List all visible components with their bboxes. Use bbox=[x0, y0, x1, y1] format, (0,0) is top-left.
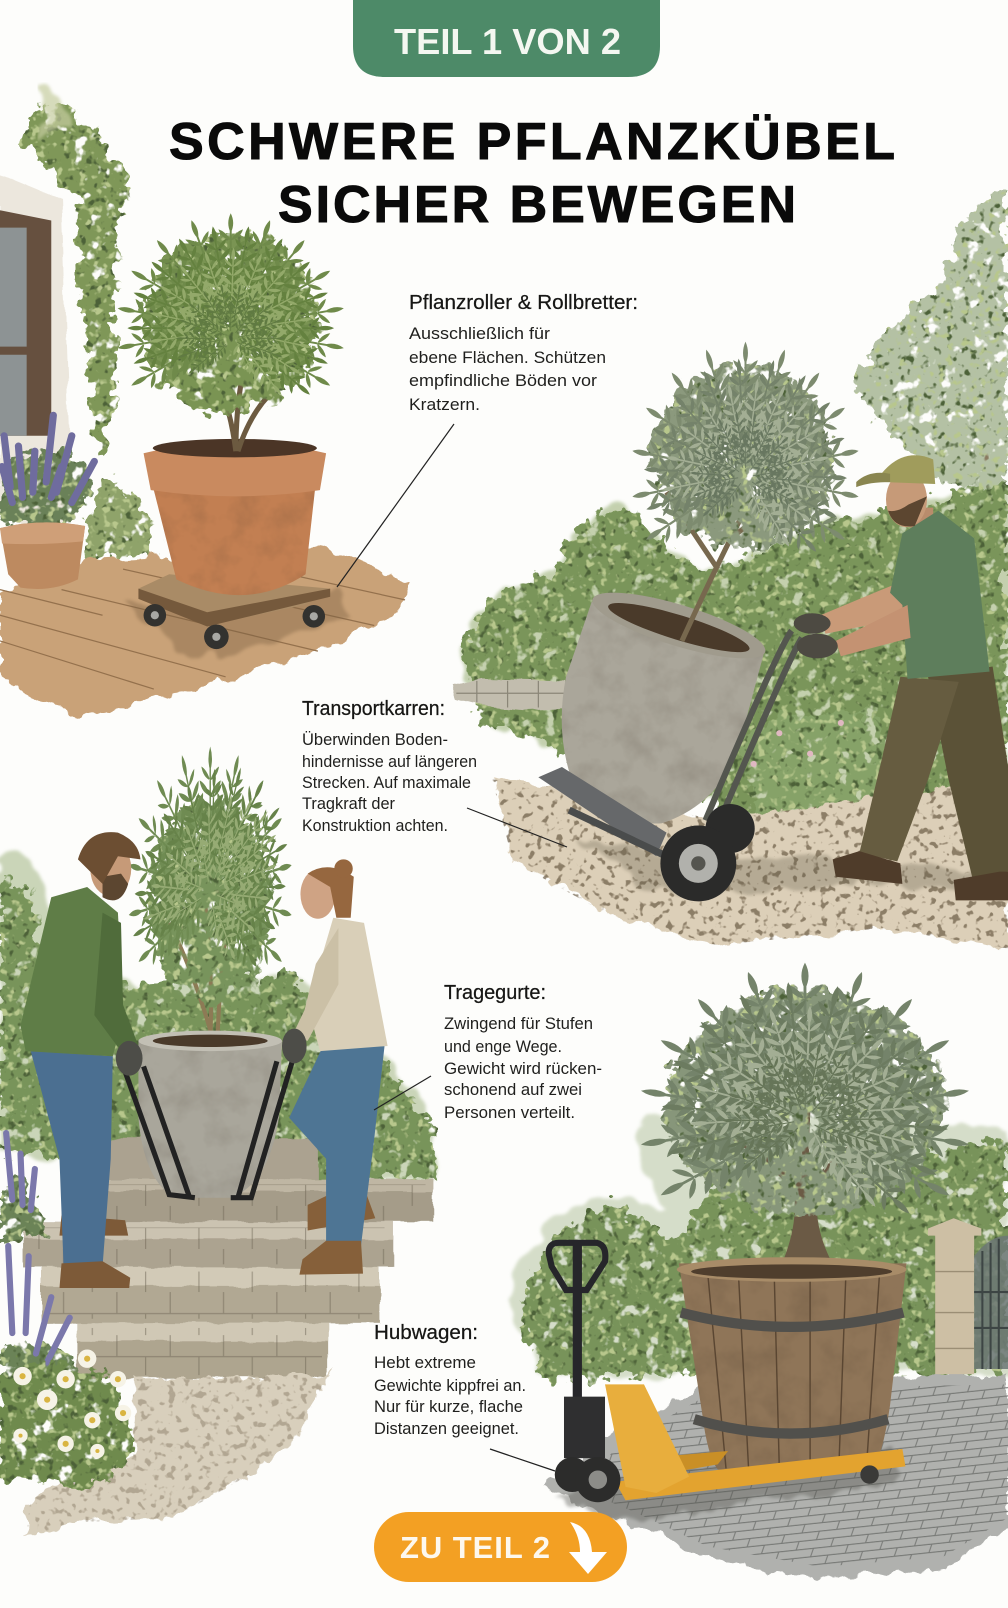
grey pot with straps bbox=[125, 1031, 292, 1198]
callout: Hubwagen bbox=[374, 1322, 526, 1438]
callout: Hubwagen: Nur für kurze, flache bbox=[374, 1398, 523, 1416]
panel: plant roller scene bbox=[0, 87, 410, 718]
callout: Pflanzroller: Kratzern. bbox=[409, 396, 480, 414]
callout: Tragegurte: und enge Wege. bbox=[444, 1038, 562, 1056]
callout: Pflanzroller: empfindliche Böden vor bbox=[409, 372, 598, 390]
concrete pot bbox=[562, 580, 771, 824]
callout: Transportkarren: Überwinden Boden- bbox=[302, 731, 448, 749]
leader line: Transportkarren bbox=[467, 808, 567, 847]
callout: Tragegurte: Personen verteilt. bbox=[444, 1104, 575, 1122]
callout: Pflanzroller bbox=[409, 292, 638, 414]
title: SCHWERE PFLANZKÜBEL bbox=[169, 113, 895, 171]
callout: Transportkarren bbox=[302, 698, 477, 835]
background bushes bbox=[508, 1113, 1008, 1379]
badge: part 1 of 2: TEIL 1 VON 2 bbox=[394, 21, 621, 62]
button: to part 2 bbox=[374, 1512, 627, 1582]
stone pillar and gate bbox=[928, 1218, 1008, 1374]
callout: Transportkarren: Transportkarren: bbox=[302, 698, 445, 720]
callout: Hubwagen: Hebt extreme bbox=[374, 1354, 476, 1372]
stone wall bbox=[453, 679, 570, 710]
climbing ivy bbox=[25, 87, 159, 559]
leader line: Hubwagen bbox=[490, 1449, 555, 1471]
callout: Pflanzroller: Ausschließlich für bbox=[409, 325, 551, 343]
panel: pallet truck scene bbox=[508, 951, 1008, 1579]
man pushing bbox=[794, 455, 1008, 900]
callout: Hubwagen: Distanzen geeignet. bbox=[374, 1420, 519, 1438]
lavender bbox=[0, 1133, 77, 1405]
panel: carrying straps scene bbox=[0, 747, 436, 1538]
callout: Transportkarren: Tragkraft der bbox=[302, 795, 395, 813]
callout: Transportkarren: Konstruktion achten. bbox=[302, 817, 448, 835]
callout: Tragegurte bbox=[444, 982, 602, 1122]
button: to part 2: ZU TEIL 2 bbox=[400, 1530, 550, 1565]
callout: Transportkarren: Strecken. Auf maximale bbox=[302, 774, 471, 792]
paved driveway bbox=[543, 1374, 1008, 1579]
badge: part 1 of 2 bbox=[353, 0, 660, 77]
wooden deck bbox=[0, 547, 410, 718]
leader line: Pflanzroller bbox=[337, 424, 454, 587]
olive tree on hand truck bbox=[629, 335, 873, 641]
lavender pot bbox=[0, 415, 94, 589]
callout: Tragegurte: schonend auf zwei bbox=[444, 1081, 582, 1099]
callout: Hubwagen: Gewichte kippfrei an. bbox=[374, 1377, 526, 1395]
paved path bbox=[26, 1374, 328, 1538]
rolling board bbox=[138, 574, 330, 649]
background tree bbox=[856, 190, 1008, 533]
shrub on roller bbox=[115, 208, 352, 451]
gravel path bbox=[492, 779, 1008, 949]
pallet truck bbox=[549, 1243, 905, 1502]
stone steps bbox=[23, 1138, 433, 1378]
title bbox=[169, 113, 895, 234]
callout: Tragegurte: Zwingend für Stufen bbox=[444, 1015, 593, 1033]
callout: Transportkarren: hindernisse auf längeren bbox=[302, 753, 477, 771]
icon: curved arrow bbox=[569, 1522, 607, 1574]
woman carrying bbox=[282, 859, 388, 1275]
house wall bbox=[0, 174, 70, 543]
callout: Tragegurte: Tragegurte: bbox=[444, 982, 546, 1004]
white flowers bbox=[0, 1349, 138, 1487]
hand truck bbox=[538, 631, 802, 901]
panel: hand truck scene bbox=[453, 190, 1008, 949]
olive tree in barrel bbox=[637, 951, 979, 1269]
callout: Pflanzroller: ebene Flächen. Schützen bbox=[409, 349, 606, 367]
garden bushes bbox=[461, 482, 1008, 820]
title: SICHER BEWEGEN bbox=[278, 176, 796, 234]
callout: Tragegurte: Gewicht wird rücken- bbox=[444, 1060, 602, 1078]
leader line: Tragegurte bbox=[374, 1076, 431, 1110]
background foliage bbox=[0, 857, 436, 1179]
wooden barrel bbox=[677, 1257, 906, 1469]
callout: Pflanzroller: Pflanzroller & Rollbretter: bbox=[409, 292, 638, 314]
callout: Hubwagen: Hubwagen: bbox=[374, 1322, 478, 1344]
terracotta pot bbox=[144, 439, 326, 595]
olive sapling bbox=[119, 747, 313, 1041]
man carrying bbox=[21, 832, 143, 1288]
